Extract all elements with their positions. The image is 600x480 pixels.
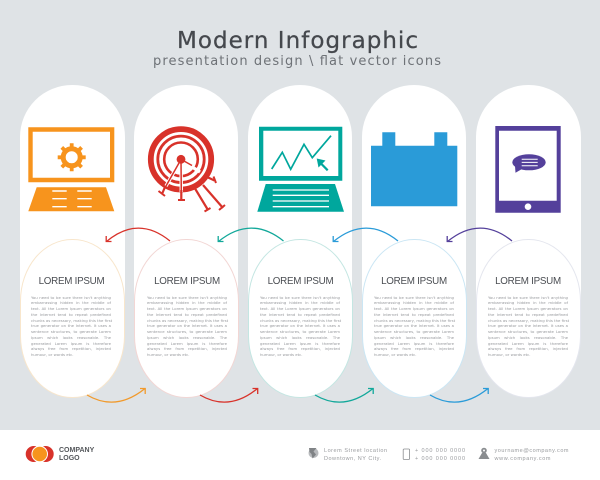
text: company logo: LOGO	[59, 455, 80, 462]
text block: column 3: always free from repetition, injected	[260, 346, 340, 351]
text block: column 5: the Internet tend to repeat predefined	[488, 312, 568, 317]
text block: column 5	[488, 295, 569, 357]
arrow: purple top	[447, 228, 512, 242]
arrow: red top	[106, 228, 170, 242]
text block: column 1: always free from repetition, injected	[31, 346, 111, 351]
heading: column 1: LOREM IPSUM	[39, 276, 104, 286]
icon: battery	[371, 132, 457, 206]
text block: column 1: You need to be sure there isn't anything	[31, 295, 111, 300]
text block: column 2: You need to be sure there isn't anything	[147, 295, 227, 300]
arrow: blue bottom	[430, 388, 488, 402]
text block: column 4: Ipsum which looks reasonable. The	[374, 335, 454, 340]
panel: oval 4	[362, 239, 467, 398]
icon: laptop with gear	[28, 127, 114, 211]
subtitle: presentation design \ flat vector icons	[153, 54, 441, 69]
text block: column 2: chunks as necessary, making this the first	[147, 318, 228, 323]
text block: column 4: true generator on the Internet. It uses a	[374, 323, 454, 328]
text block: column 5: humour, or words etc.	[488, 352, 530, 357]
text block: column 4: chunks as necessary, making this the first	[374, 318, 455, 323]
text block: column 5: You need to be sure there isn't anything	[488, 295, 568, 300]
text: address: Lorem Street location	[324, 448, 387, 454]
text block: column 5: chunks as necessary, making this the first	[488, 318, 569, 323]
text block: column 1: true generator on the Internet. It uses a	[31, 323, 111, 328]
text block: column 2: humour, or words etc.	[147, 352, 189, 357]
text block: column 5: sentence structures, to generate Lorem	[488, 329, 568, 334]
text block: column 4: generated Lorem Ipsum is therefore	[374, 341, 454, 346]
text block: column 1: Ipsum which looks reasonable. The	[31, 335, 111, 340]
text block: column 3: Ipsum which looks reasonable. The	[260, 335, 340, 340]
panel: oval 1	[20, 239, 125, 398]
panel: oval 3	[248, 239, 353, 398]
text block: column 2: embarrassing hidden in the middle of	[147, 300, 227, 305]
text block: column 1: humour, or words etc.	[31, 352, 73, 357]
text block: column 1: the Internet tend to repeat predefined	[31, 312, 111, 317]
text block: column 3	[260, 295, 341, 357]
icon: company logo	[26, 446, 54, 462]
text: phone numbers: + 000 000 0000	[415, 456, 465, 462]
text block: column 4: text. All the Lorem Ipsum generators on	[374, 306, 454, 311]
panel: column 5 background	[476, 85, 580, 318]
text: company logo: COMPANY	[59, 447, 95, 454]
icon: location pin	[478, 448, 490, 459]
arrow: blue top	[333, 228, 398, 242]
icon: target with arrows	[151, 129, 225, 212]
text block: column 1: sentence structures, to generate Lorem	[31, 329, 111, 334]
heading: column 4: LOREM IPSUM	[381, 276, 447, 286]
arrow: teal top	[218, 228, 284, 242]
text block: column 4: You need to be sure there isn't anything	[374, 295, 454, 300]
panel: oval 5	[476, 239, 581, 398]
text block: column 1: generated Lorem Ipsum is therefore	[31, 341, 111, 346]
text block: column 2: true generator on the Internet. It uses a	[147, 323, 227, 328]
text block: column 4: always free from repetition, injected	[374, 346, 454, 351]
heading: column 5: LOREM IPSUM	[495, 276, 561, 286]
text block: column 5: always free from repetition, injected	[488, 346, 568, 351]
panel: column 4 background	[362, 85, 466, 318]
text block: column 3: text. All the Lorem Ipsum generators on	[260, 306, 340, 311]
text block: column 3: the Internet tend to repeat predefined	[260, 312, 340, 317]
panel: column 1 background	[20, 85, 124, 318]
panel: column 2 background	[134, 85, 238, 318]
text block: column 2: text. All the Lorem Ipsum generators on	[147, 306, 227, 311]
text block: column 2: Ipsum which looks reasonable. The	[147, 335, 227, 340]
text block: column 5: Ipsum which looks reasonable. The	[488, 335, 568, 340]
text block: column 2: generated Lorem Ipsum is therefore	[147, 341, 227, 346]
text: phone numbers: + 000 000 0000	[415, 448, 465, 454]
text block: column 2: the Internet tend to repeat predefined	[147, 312, 227, 317]
text: web contact	[494, 448, 569, 462]
text block: column 3: generated Lorem Ipsum is therefore	[260, 341, 340, 346]
text block: column 5: generated Lorem Ipsum is therefore	[488, 341, 568, 346]
text block: column 4: embarrassing hidden in the middle of	[374, 300, 454, 305]
icon: tablet with chat bubble	[495, 126, 561, 213]
text: address	[324, 448, 387, 462]
text: company logo	[59, 447, 95, 462]
text: phone numbers	[415, 448, 465, 462]
text block: column 3: true generator on the Internet. It uses a	[260, 323, 340, 328]
text block: column 3: You need to be sure there isn't anything	[260, 295, 340, 300]
text block: column 3: sentence structures, to generate Lorem	[260, 329, 340, 334]
heading: column 3: LOREM IPSUM	[268, 276, 333, 286]
text block: column 4: humour, or words etc.	[374, 352, 416, 357]
text block: column 4: sentence structures, to generate Lorem	[374, 329, 454, 334]
text block: column 2: sentence structures, to generate Lorem	[147, 329, 227, 334]
text: address: Downtown, NY City.	[324, 456, 381, 462]
text block: column 3: chunks as necessary, making this the first	[260, 318, 341, 323]
text block: column 5: embarrassing hidden in the middle of	[488, 300, 568, 305]
text block: column 4	[374, 295, 455, 357]
panel: oval 2	[134, 239, 239, 398]
heading: column 2: LOREM IPSUM	[154, 276, 220, 286]
title: Modern Infographic	[177, 28, 418, 54]
text block: column 1: text. All the Lorem Ipsum generators on	[31, 306, 111, 311]
text block: column 4: the Internet tend to repeat predefined	[374, 312, 454, 317]
text block: column 2	[147, 295, 228, 357]
text block: column 3: humour, or words etc.	[260, 352, 302, 357]
arrow: orange bottom	[87, 388, 145, 402]
text block: column 1: chunks as necessary, making this the first	[31, 318, 112, 323]
text: web contact: www.company.com	[494, 456, 551, 462]
panel: footer band	[0, 430, 600, 480]
arrow: teal bottom	[315, 388, 373, 402]
text block: column 5: text. All the Lorem Ipsum generators on	[488, 306, 568, 311]
text block: column 1	[31, 295, 112, 357]
icon: laptop with chart	[257, 127, 344, 212]
text block: column 3: embarrassing hidden in the middle of	[260, 300, 340, 305]
panel: column 3 background	[248, 85, 352, 318]
icon: phone	[403, 449, 410, 460]
icon: globe	[308, 448, 318, 458]
arrow: red bottom	[200, 388, 258, 402]
text block: column 1: embarrassing hidden in the middle of	[31, 300, 111, 305]
text block: column 2: always free from repetition, injected	[147, 346, 227, 351]
text block: column 5: true generator on the Internet. It uses a	[488, 323, 568, 328]
text: web contact: yourname@company.com	[494, 448, 569, 454]
